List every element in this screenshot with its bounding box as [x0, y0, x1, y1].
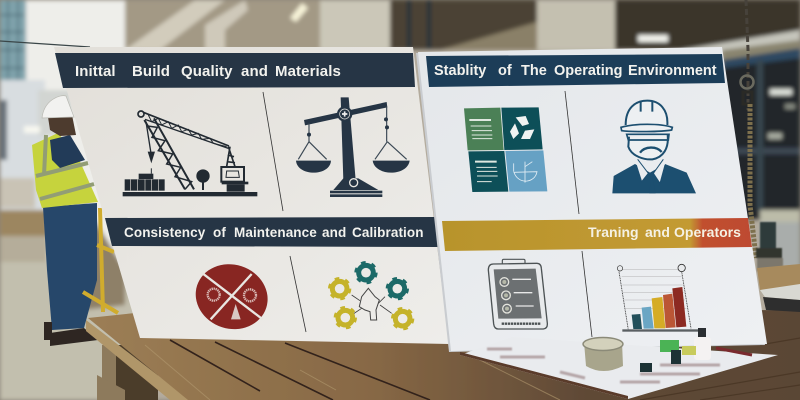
icon: gears and hub [329, 262, 413, 329]
wire [0, 41, 90, 47]
heading: Training and Operators: Traning [588, 224, 639, 240]
small bottles and vials [640, 328, 752, 372]
heading band: Training and Operators [442, 218, 752, 251]
heading: Consistency of Maintenance and Calibration: Consistency [124, 225, 206, 240]
heading: Initial Build Quality and Materials: and [241, 63, 268, 80]
heading band: Initial Build Quality and Materials [55, 53, 415, 88]
divider lower [582, 251, 592, 337]
icon: chain [740, 0, 756, 258]
heading: Consistency of Maintenance and Calibration: Maintenance [234, 225, 317, 240]
divider upper [263, 92, 283, 211]
table top [88, 310, 800, 400]
heading: Stability of the Operating Environment: The [521, 63, 547, 79]
chart: rising bar chart [617, 264, 706, 332]
heading: Consistency of Maintenance and Calibration: of [213, 225, 226, 240]
divider lower [290, 256, 306, 332]
icon: red circle [187, 255, 276, 338]
metal can [583, 338, 623, 371]
paper sheet on table [460, 337, 778, 399]
icon: clipboard checklist [488, 259, 547, 329]
table [86, 264, 800, 400]
table leg [102, 345, 158, 400]
heading: Initial Build Quality and Materials: Build [132, 63, 170, 80]
worker [32, 96, 98, 346]
machinery base [756, 222, 783, 271]
panel: right board [416, 47, 767, 352]
head [48, 115, 76, 136]
heading: Initial Build Quality and Materials: Materials [275, 63, 341, 80]
heading band: Consistency of Maintenance and Calibration [105, 217, 439, 247]
heading band: Stability of the Operating Environment [426, 54, 725, 87]
divider upper [565, 91, 579, 214]
back table and keyboard [757, 264, 800, 290]
heading: Stability of the Operating Environment: of [498, 63, 512, 79]
icon: crane [123, 111, 257, 196]
heading: Initial Build Quality and Materials: Quality [181, 63, 233, 80]
icon: balance scale [296, 97, 410, 197]
shirt [50, 135, 85, 168]
heading: Stability of the Operating Environment: Environment [628, 63, 717, 79]
heading: Training and Operators: and [645, 224, 670, 240]
table side edge [86, 320, 190, 400]
heading: Consistency of Maintenance and Calibration: and [322, 225, 346, 240]
panel: left board [54, 47, 449, 344]
icon: engineer with hard hat [612, 101, 696, 193]
helmet [42, 96, 74, 118]
worker legs [43, 203, 97, 330]
heading: Consistency of Maintenance and Calibration: Calibration [352, 225, 424, 240]
yellow railing [83, 208, 118, 313]
heading: Initial Build Quality and Materials: Inittal [75, 63, 116, 80]
icon: four-square grid [464, 107, 547, 192]
heading: Training and Operators: Operators [674, 224, 741, 240]
vest [32, 133, 98, 208]
heading: Stability of the Operating Environment: Operating [554, 63, 622, 79]
heading: Stability of the Operating Environment: Stablity [434, 63, 486, 79]
boots [44, 322, 98, 346]
